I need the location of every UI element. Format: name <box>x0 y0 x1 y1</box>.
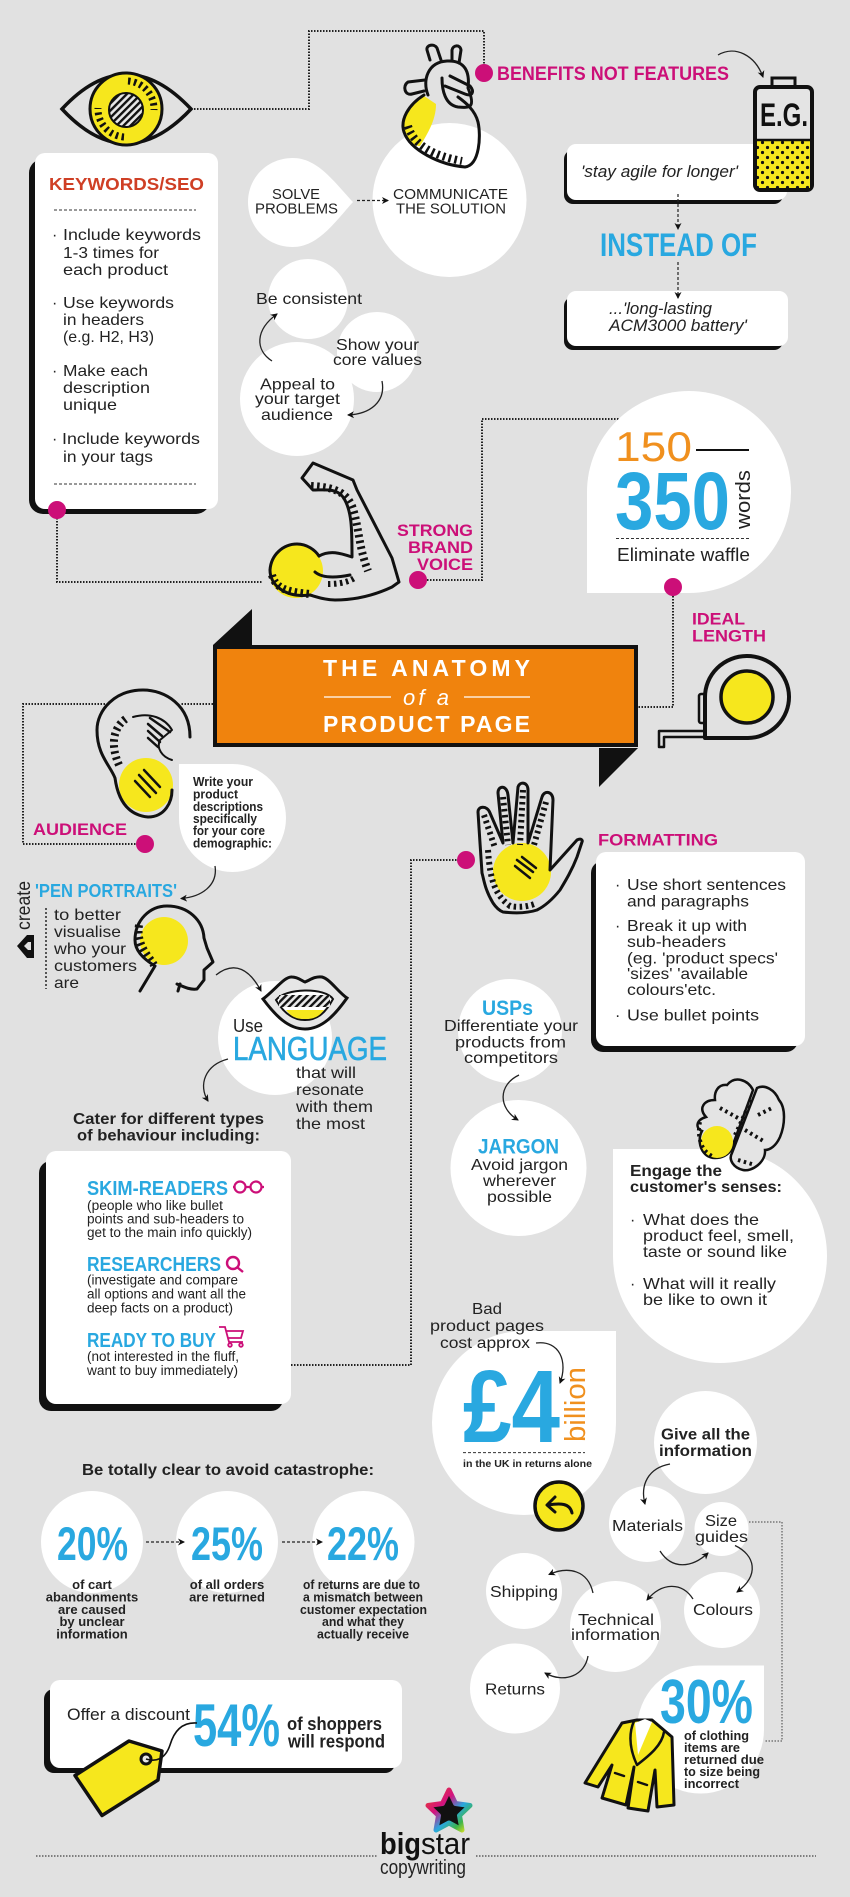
title line 2: of a <box>403 685 449 710</box>
panel: engage the senses: What will it really <box>643 1276 776 1293</box>
bubble: write your descriptions: specifically <box>193 812 257 826</box>
bubble: materials <box>609 1486 685 1562</box>
stat: 22 percent: of returns are due to <box>303 1577 420 1592</box>
skim-readers: points and sub-headers to <box>87 1212 244 1226</box>
heading: benefits not features: BENEFITS NOT FEATURES <box>497 64 729 85</box>
icon: battery <box>755 78 812 190</box>
logo: bigstar copywriting: copywriting <box>380 1857 466 1879</box>
stat: 25 percent: 25% <box>191 1517 263 1570</box>
skim-readers: get to the main info quickly) <box>87 1225 252 1240</box>
bubble: 4 billion: billion <box>560 1367 592 1442</box>
heading: cater for behaviour <box>73 1111 264 1144</box>
bubble: appeal to target audience <box>240 342 354 456</box>
panel: formatting tips: Use short sentences <box>627 877 786 894</box>
panel: behaviour types <box>39 1151 291 1411</box>
bubble: technical information: information <box>571 1627 660 1644</box>
arrow: bubble to pen portraits <box>181 866 215 898</box>
bubble: use language <box>218 981 387 1133</box>
bubble: communicate the solution: THE SOLUTION <box>396 200 506 218</box>
bubble: 4 billion <box>432 1331 616 1515</box>
stat: 20 percent: of cart <box>72 1577 113 1592</box>
panel: discount: of shoppers <box>287 1714 382 1734</box>
heading: pen portraits: 'PEN PORTRAITS' <box>35 881 177 901</box>
panel: engage the senses: · <box>630 1212 635 1229</box>
panel: discount: will respond <box>287 1732 385 1752</box>
ready to buy: (not interested in the fluff, <box>87 1349 239 1364</box>
panel: discount <box>44 1680 402 1773</box>
marker: keywords dot <box>48 501 66 519</box>
arrow: head to language <box>216 968 261 991</box>
bubble: show your core values: core values <box>333 352 422 369</box>
keyword tips: description <box>63 380 150 397</box>
title line 1: THE ANATOMY <box>323 655 530 681</box>
text: visualise customers: customers <box>54 958 137 975</box>
bubble: size guides: guides <box>695 1529 748 1546</box>
stat: 20 percent: are caused <box>58 1602 126 1617</box>
logo: bigstar copywriting: star <box>421 1826 470 1861</box>
icon: mouth <box>263 977 347 1029</box>
icon: battery: E.G. <box>760 97 808 133</box>
label: strong brand voice: BRAND <box>408 538 473 557</box>
icon: heart <box>403 45 479 167</box>
bubble: be consistent: Be consistent <box>256 291 363 308</box>
keyword tips: · <box>52 227 57 244</box>
icon: pen nib <box>17 935 34 958</box>
connector: length to banner <box>638 596 673 707</box>
bubble: 30 percent: incorrect <box>684 1776 740 1791</box>
label: ideal length: IDEAL <box>692 610 745 628</box>
icon: tape measure <box>659 656 789 747</box>
bubble: colours <box>684 1572 760 1648</box>
stat: 20 percent <box>41 1491 143 1642</box>
panel: formatting tips: · <box>615 1008 620 1024</box>
panel: formatting tips: sub-headers <box>627 934 726 951</box>
researchers: all options and want all the <box>87 1286 246 1302</box>
text: visualise customers: to better <box>54 907 122 924</box>
icon: brain <box>697 1080 784 1170</box>
researchers: (investigate and compare <box>87 1272 238 1288</box>
heading: cater for behaviour: of behaviour including: <box>77 1128 260 1144</box>
stat: 22 percent: 22% <box>327 1517 399 1570</box>
bubble: write your descriptions: product <box>193 788 239 802</box>
keyword tips: each product <box>63 262 169 279</box>
ready to buy: READY TO BUY <box>87 1330 217 1352</box>
text: bad product pages: cost approx <box>440 1335 530 1352</box>
bubble: jargon: JARGON <box>478 1136 559 1158</box>
bubble: size guides <box>694 1502 748 1556</box>
keyword tips: · <box>52 295 57 312</box>
arrow: materials to size <box>660 1551 708 1565</box>
icon: flexed arm <box>269 463 399 600</box>
icon: back arrow <box>535 1482 583 1530</box>
panel: engage the senses: What does the <box>643 1212 759 1229</box>
bubble: solve problems: SOLVE <box>272 186 320 203</box>
heading: be totally clear: Be totally clear to avoid catastrophe: <box>82 1462 374 1479</box>
keyword tips: Make each <box>63 363 148 380</box>
panel: long-lasting battery: ACM3000 battery' <box>608 316 748 335</box>
panel: keywords/SEO <box>29 153 218 514</box>
label: strong brand voice: VOICE <box>417 555 473 574</box>
bubble: appeal to target audience: your target <box>255 391 341 408</box>
marker: ideal length dot <box>664 578 682 596</box>
stat: 22 percent: a mismatch between <box>303 1590 423 1604</box>
arrow: appeal to consistent <box>260 314 277 361</box>
icon: head <box>135 906 213 991</box>
keyword tips: Use keywords <box>63 295 174 312</box>
panel: long-lasting battery <box>564 291 788 350</box>
footer rule right <box>476 1855 816 1857</box>
marker: benefits dot <box>475 64 493 82</box>
panel: formatting tips: 'sizes' 'available <box>627 966 748 983</box>
text: visualise customers: who your <box>53 941 127 958</box>
bubble: 30 percent: returned due <box>684 1752 764 1767</box>
bubble: write your descriptions <box>179 764 286 872</box>
arrow: 25 to 22 <box>282 1541 322 1543</box>
bubble: technical information: Technical <box>578 1612 654 1629</box>
bubble: be consistent <box>256 259 363 339</box>
footer rule left <box>36 1855 377 1857</box>
icon: cart <box>219 1327 243 1347</box>
bubble: USPs <box>444 979 579 1083</box>
panel: engage the senses <box>613 1149 827 1363</box>
label: formatting: FORMATTING <box>598 830 718 850</box>
panel: engage the senses: be like to own it <box>643 1292 768 1309</box>
arrow: give to materials <box>644 1464 670 1504</box>
stat: 22 percent <box>300 1491 427 1642</box>
panel: stay agile: 'stay agile for longer' <box>581 162 739 181</box>
bubble: jargon: Avoid jargon <box>471 1157 568 1174</box>
figure: 150: 150 <box>615 423 692 470</box>
bubble: appeal to target audience: audience <box>261 407 333 424</box>
keyword tips: Include keywords <box>62 431 200 448</box>
label: strong brand voice <box>397 521 473 574</box>
figure: 350: 350 <box>615 456 730 547</box>
icon: price tag <box>75 1723 197 1816</box>
bubble: USPs: competitors <box>464 1050 558 1067</box>
bubble: USPs: products from <box>455 1034 566 1052</box>
stat: 22 percent: and what they <box>322 1614 405 1629</box>
bubble: appeal to target audience: Appeal to <box>260 376 335 394</box>
panel: formatting tips: Break it up with <box>627 918 747 935</box>
icon: glasses <box>233 1182 264 1192</box>
bubble: give all the information <box>654 1391 757 1494</box>
bubble: returns: Returns <box>485 1682 545 1698</box>
arrow: technical to returns <box>545 1656 588 1678</box>
panel: formatting tips: Use bullet points <box>627 1008 759 1024</box>
stat: 20 percent: 20% <box>57 1517 128 1570</box>
bubble: 150-350 words <box>587 391 791 593</box>
panel: discount: 54% <box>193 1692 280 1759</box>
arrow: colours to technical <box>647 1586 693 1600</box>
connector: eye to benefits <box>191 31 484 109</box>
icon: eye <box>62 73 191 145</box>
arrow: values to appeal <box>348 381 383 415</box>
bubble: 30 percent: to size being <box>684 1764 760 1779</box>
text: bad product pages: Bad <box>472 1301 502 1318</box>
bubble: use language: LANGUAGE <box>233 1030 387 1067</box>
bubble: jargon <box>450 1100 586 1236</box>
keyword tips: (e.g. H2, H3) <box>63 329 154 346</box>
bubble: materials: Materials <box>612 1518 683 1535</box>
bubble: solve problems <box>248 158 353 247</box>
heading: keywords: KEYWORDS/SEO <box>49 174 204 194</box>
bubble: write your descriptions: demographic: <box>193 836 272 850</box>
keyword tips: 1-3 times for <box>63 245 160 262</box>
arrow: USPs to jargon <box>503 1075 519 1120</box>
bubble: write your descriptions: descriptions <box>193 800 263 814</box>
marker: brand voice dot <box>409 571 427 589</box>
panel: stay agile <box>564 144 787 204</box>
keyword tips: · <box>52 431 57 448</box>
bubble: jargon: possible <box>487 1189 552 1206</box>
connector: keywords to brand voice <box>57 518 263 582</box>
keyword tips: in headers <box>63 312 144 329</box>
bubble: use language: resonate <box>296 1082 364 1099</box>
stat: 25 percent <box>176 1491 278 1604</box>
bubble: write your descriptions: Write your <box>193 775 253 789</box>
arrow: size to colours <box>735 1546 752 1592</box>
bubble: use language: Use <box>233 1016 263 1036</box>
bubble: give all the information: information <box>659 1443 752 1460</box>
text: bad product pages <box>430 1301 544 1352</box>
label: strong brand voice: STRONG <box>397 521 473 540</box>
panel: discount: Offer a discount <box>67 1705 190 1724</box>
bubble: write your descriptions: for your core <box>193 824 265 838</box>
marker: formatting dot <box>457 851 475 869</box>
label: audience: AUDIENCE <box>33 820 127 839</box>
keyword tips <box>52 227 201 466</box>
bubble: 4 billion: £4 <box>463 1349 560 1464</box>
bubble: USPs: Differentiate your <box>444 1018 579 1035</box>
bubble: 30 percent: 30% <box>660 1668 753 1737</box>
keyword tips: unique <box>63 397 117 414</box>
connector: behaviour to formatting <box>291 860 457 1365</box>
label: create: create <box>14 881 35 930</box>
logo: bigstar copywriting <box>380 1790 470 1879</box>
bubble: use language: the most <box>296 1116 366 1133</box>
logo: bigstar copywriting: big <box>380 1826 421 1861</box>
stat: 20 percent: information <box>56 1626 128 1642</box>
bubble: 30 percent <box>637 1666 764 1794</box>
label: ideal length: LENGTH <box>692 626 766 646</box>
bubble: communicate the solution <box>372 123 526 277</box>
title banner <box>213 609 638 787</box>
ready to buy <box>86 1330 239 1378</box>
bubble: solve problems: PROBLEMS <box>255 200 338 218</box>
researchers: RESEARCHERS <box>87 1254 221 1276</box>
heading: instead of: INSTEAD OF <box>600 227 757 263</box>
bubble: returns <box>470 1644 560 1734</box>
bubble: 30 percent: of clothing <box>684 1728 749 1743</box>
heading: cater for behaviour: Cater for different types <box>73 1111 264 1128</box>
icon: yellow jacket <box>585 1719 674 1811</box>
panel: formatting tips <box>591 852 805 1052</box>
bubble: 30 percent: items are <box>684 1740 740 1755</box>
keyword tips: Include keywords <box>63 227 201 244</box>
bubble: use language: with them <box>295 1099 373 1116</box>
connector: size guides to 30 percent <box>749 1522 782 1741</box>
icon: hand <box>478 783 582 913</box>
text: visualise customers: visualise <box>54 924 121 941</box>
panel: formatting tips: colours'etc. <box>627 982 716 999</box>
panel: engage the senses: taste or sound like <box>643 1244 787 1261</box>
skim-readers: SKIM-READERS <box>87 1178 228 1200</box>
label: ideal length <box>692 610 766 646</box>
arrow: cost to 4 billion <box>536 1343 563 1383</box>
panel: engage the senses: Engage the <box>630 1163 722 1180</box>
unit: words: words <box>733 470 755 530</box>
text: visualise customers <box>53 907 137 992</box>
icon: ear <box>97 690 190 817</box>
skim-readers: (people who like bullet <box>87 1198 223 1213</box>
keyword tips: in your tags <box>63 449 153 466</box>
stat: 20 percent: abandonments <box>46 1590 138 1604</box>
ready to buy: want to buy immediately) <box>86 1363 238 1378</box>
text: bad product pages: product pages <box>430 1318 544 1335</box>
caption: eliminate waffle: Eliminate waffle <box>617 545 750 565</box>
bubble: show your core values: Show your <box>336 337 420 354</box>
panel: long-lasting battery: ...'long-lasting <box>609 299 713 318</box>
bubble: colours: Colours <box>693 1602 753 1619</box>
connector: banner to audience <box>23 704 213 844</box>
panel: formatting tips: (eg. 'product specs' <box>627 950 778 968</box>
bubble: show your core values <box>333 312 422 392</box>
stat: 25 percent: of all orders <box>190 1577 264 1592</box>
arrow: 20 to 25 <box>146 1541 184 1543</box>
arrow: solve to communicate <box>357 200 388 202</box>
arrow: technical to shipping <box>549 1570 593 1593</box>
marker: audience dot <box>136 835 154 853</box>
arrow: benefits to battery <box>718 51 763 77</box>
bubble: shipping: Shipping <box>490 1584 558 1601</box>
stat: 22 percent: customer expectation <box>300 1602 427 1617</box>
panel: engage the senses: product feel, smell, <box>643 1228 794 1245</box>
connector: brand voice to word count <box>427 419 619 580</box>
bubble: 4 billion: in the UK in returns alone <box>463 1458 592 1470</box>
panel: formatting tips: · <box>615 877 620 894</box>
panel: formatting tips: and paragraphs <box>627 894 749 910</box>
keyword tips: · <box>52 363 57 380</box>
bubble: shipping <box>486 1553 562 1629</box>
bubble: use language: that will <box>296 1065 356 1082</box>
text: visualise customers: are <box>54 975 79 992</box>
skim-readers <box>87 1178 252 1240</box>
icon: magnifier <box>227 1257 243 1272</box>
arrow: language to cater <box>204 1059 228 1101</box>
bubble: size guides: Size <box>705 1513 737 1530</box>
panel: engage the senses: customer's senses: <box>630 1179 782 1196</box>
arrow: instead of to battery <box>677 262 679 298</box>
panel: engage the senses: · <box>630 1276 635 1293</box>
arrow: agile to instead of <box>677 194 679 229</box>
stat: 20 percent: by unclear <box>59 1614 125 1629</box>
bubble: USPs: USPs <box>482 997 533 1020</box>
researchers <box>87 1254 246 1316</box>
bubble: give all the information: Give all the <box>661 1426 750 1444</box>
bubble: jargon: wherever <box>482 1173 557 1190</box>
stat: 25 percent: are returned <box>189 1590 265 1604</box>
bubble: technical information <box>570 1581 661 1672</box>
bubble: communicate the solution: COMMUNICATE <box>393 186 508 203</box>
stat: 22 percent: actually receive <box>317 1626 409 1642</box>
panel: formatting tips: · <box>615 918 620 935</box>
title line 3: PRODUCT PAGE <box>323 711 530 737</box>
researchers: deep facts on a product) <box>87 1300 233 1316</box>
